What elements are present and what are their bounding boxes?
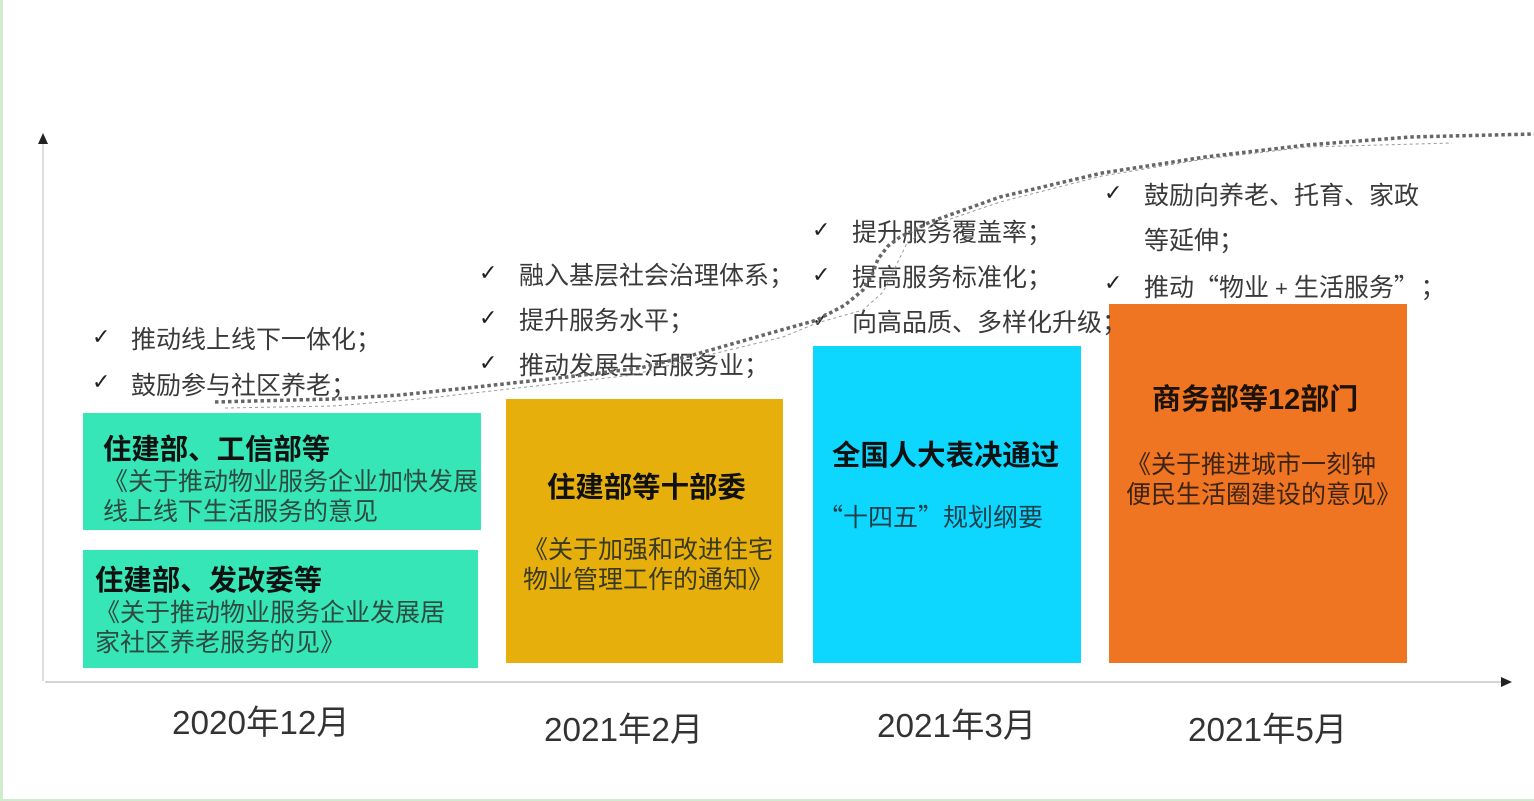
document text: [95, 599, 445, 657]
bullets: 2021-03: 提高服务标准化；: [852, 264, 1052, 292]
document text: 物业管理工作的通知》: [523, 566, 773, 594]
document text: 《关于推动物业服务企业发展居: [95, 599, 445, 627]
heading: 住建部、工信部等: [103, 434, 330, 466]
panel: 2021-03: [813, 346, 1081, 663]
bullets: 2021-02: 融入基层社会治理体系；: [519, 262, 794, 290]
bullets: 2021-03: ✓: [812, 263, 830, 288]
bullets: 2020: 鼓励参与社区养老；: [131, 372, 356, 400]
bullets: 2021-03: [812, 218, 1127, 337]
document text: [1126, 451, 1401, 509]
document text: “十四五”规划纲要: [818, 498, 1043, 534]
bullets: 2021-02: 推动发展生活服务业；: [519, 352, 769, 380]
date: 2021年3月: 2021年3月: [877, 708, 1036, 745]
document text: 线上线下生活服务的意见: [103, 498, 378, 526]
bullets: 2021-02: [479, 261, 794, 380]
bullets: 2020: ✓: [92, 325, 110, 350]
document text: 便民生活圈建设的意见》: [1126, 481, 1401, 509]
bullets: 2021-05: [1104, 181, 1445, 304]
document text: 《关于推进城市一刻钟: [1126, 451, 1376, 479]
bullets: 2021-02: ✓: [479, 351, 497, 376]
bullets: 2020: 推动线上线下一体化；: [131, 326, 381, 354]
bullets: 2021-05: 推动“物业 +生活服务” ；: [1144, 268, 1445, 304]
document text: [523, 536, 773, 594]
bullets: 2021-02: ✓: [479, 306, 497, 331]
panel: 2020 bottom: [83, 550, 478, 668]
bullets: 2021-03: 向高品质、多样化升级；: [852, 309, 1127, 337]
panel: 2021-02: [506, 399, 783, 663]
heading: 住建部等十部委: [547, 472, 746, 504]
bullets: 2021-05: ✓: [1104, 271, 1122, 296]
date: 2020年12月: 2020年12月: [172, 705, 350, 742]
bullets: 2021-03: ✓: [812, 308, 830, 333]
bullets: 2021-02: ✓: [479, 261, 497, 286]
heading: 全国人大表决通过: [832, 440, 1059, 472]
bullets: 2020: [92, 325, 381, 400]
bullets: 2021-05: 等延伸；: [1144, 227, 1244, 255]
bullets: 2021-03: 提升服务覆盖率；: [852, 219, 1052, 247]
date: 2021年2月: 2021年2月: [544, 712, 703, 749]
bullets: 2021-02: 提升服务水平；: [519, 307, 694, 335]
bullets: 2021-05: ✓: [1104, 181, 1122, 206]
document text: 《关于加强和改进住宅: [523, 536, 773, 564]
date: 2021年5月: 2021年5月: [1188, 712, 1347, 749]
document text: 家社区养老服务的见》: [95, 629, 345, 657]
panel: 2020 top: [83, 413, 481, 530]
heading: 住建部、发改委等: [95, 565, 322, 597]
document text: 《关于推动物业服务企业加快发展: [103, 468, 478, 496]
bullets: 2020: ✓: [92, 370, 110, 395]
bullets: 2021-03: ✓: [812, 218, 830, 243]
document text: [103, 468, 478, 526]
bullets: 2021-05: 鼓励向养老、托育、家政: [1144, 182, 1419, 210]
heading: 商务部等12部门: [1152, 384, 1358, 416]
panel: 2021-05: [1109, 304, 1407, 663]
